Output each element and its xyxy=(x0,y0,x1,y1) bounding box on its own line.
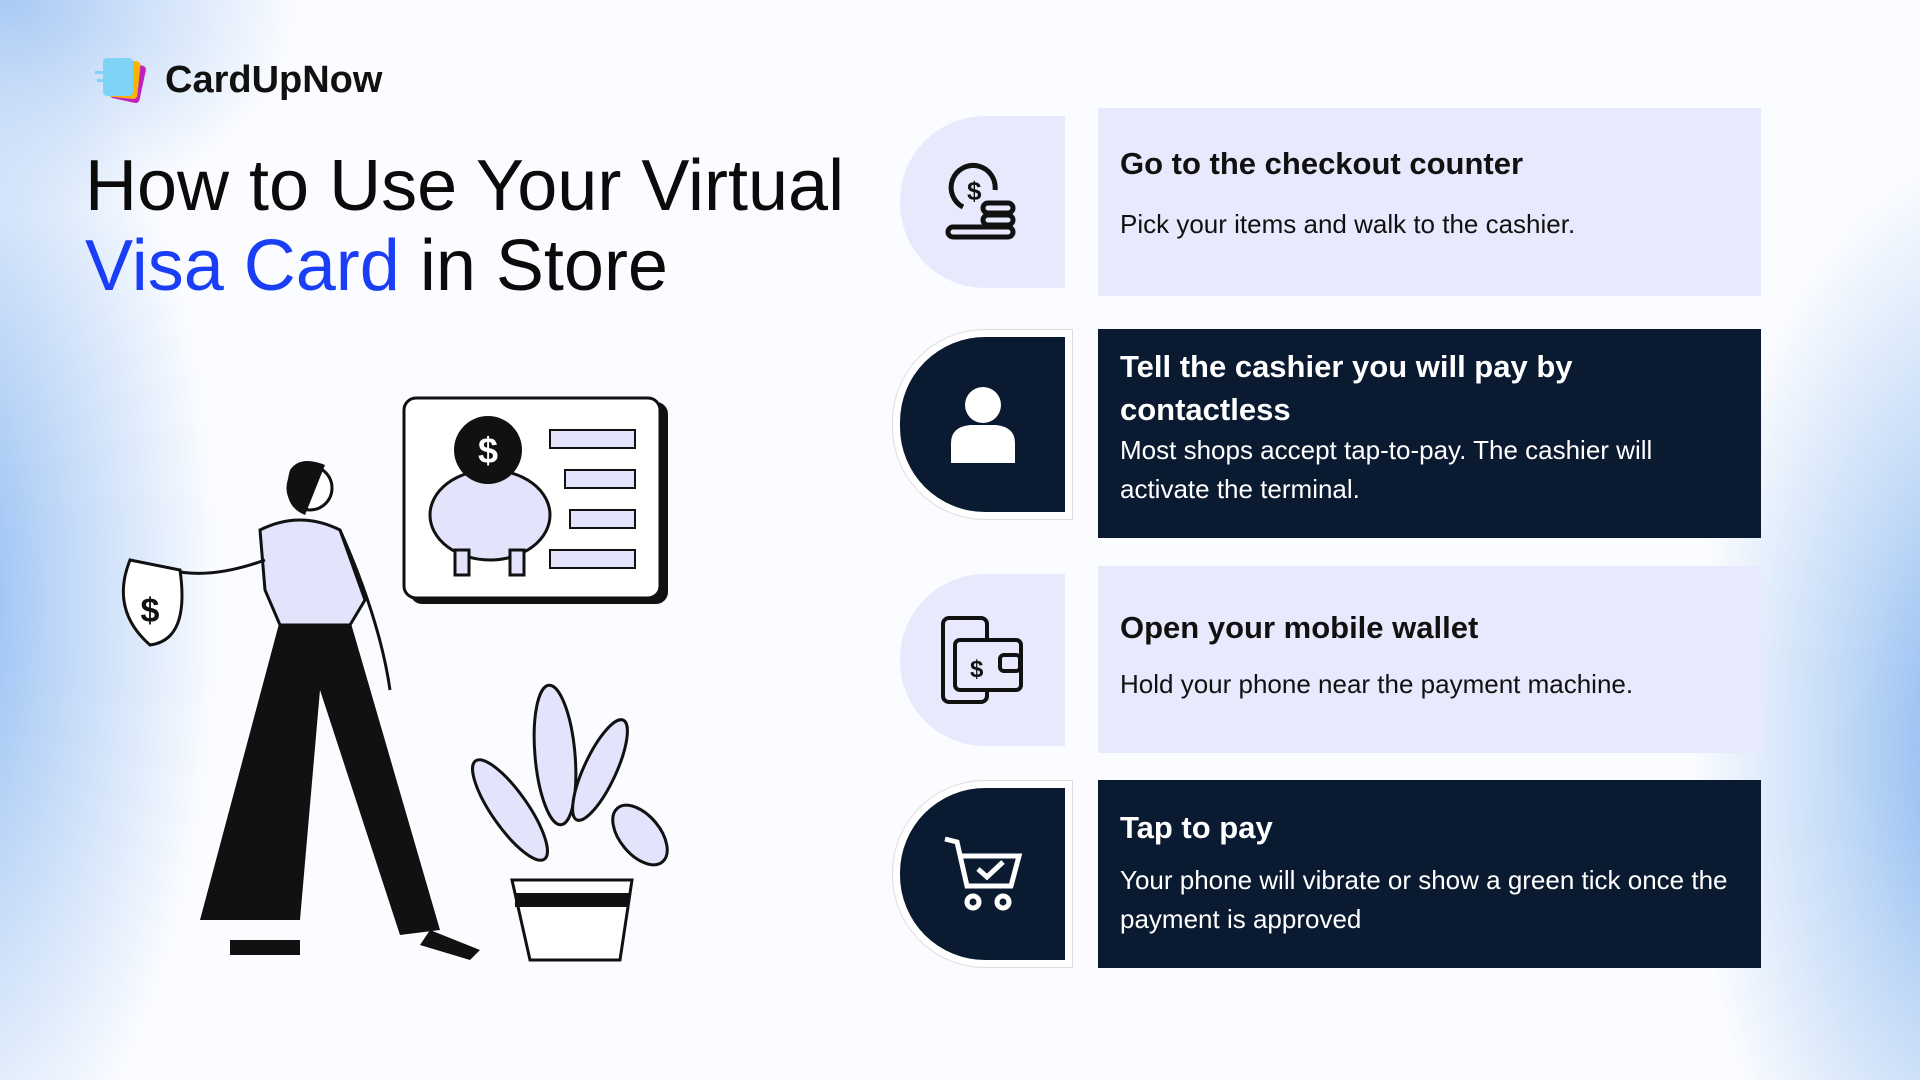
step 2 xyxy=(892,329,1761,538)
illustration: woman with money bag, piggy bank board, plant: $ xyxy=(478,430,498,471)
icon: coins xyxy=(900,116,1065,288)
step 1 xyxy=(900,108,1761,296)
card text: Tell the cashier you will pay by contactless xyxy=(1120,349,1573,427)
illustration: woman with money bag, piggy bank board, plant xyxy=(122,396,669,962)
card text: Your phone will vibrate or show a green tick once the payment is approved xyxy=(1120,865,1728,934)
card text xyxy=(1098,108,1761,296)
icon: coins: $ xyxy=(966,176,982,206)
icon: wallet phone xyxy=(900,574,1065,746)
title xyxy=(85,146,844,306)
icon: person xyxy=(900,337,1065,512)
card text xyxy=(1098,566,1761,753)
card text xyxy=(1098,329,1761,538)
icon: cart xyxy=(900,788,1065,960)
card text: Tap to pay xyxy=(1120,810,1273,845)
logo: CardUpNow xyxy=(165,59,382,101)
card text: Pick your items and walk to the cashier. xyxy=(1120,209,1575,239)
card text: Open your mobile wallet xyxy=(1120,610,1478,645)
card text: Most shops accept tap-to-pay. The cashier will activate the terminal. xyxy=(1120,435,1652,504)
illustration: woman with money bag, piggy bank board, plant: $ xyxy=(141,592,160,630)
title: Visa Card in Store xyxy=(85,226,668,306)
step 3 xyxy=(900,566,1755,753)
card text: Go to the checkout counter xyxy=(1120,146,1523,181)
card text xyxy=(1098,780,1761,968)
step 4 xyxy=(892,780,1761,968)
icon: logo cards xyxy=(95,58,146,103)
card text: Hold your phone near the payment machine. xyxy=(1120,669,1633,699)
icon: wallet phone: $ xyxy=(970,656,984,683)
title: How to Use Your Virtual xyxy=(85,146,844,226)
